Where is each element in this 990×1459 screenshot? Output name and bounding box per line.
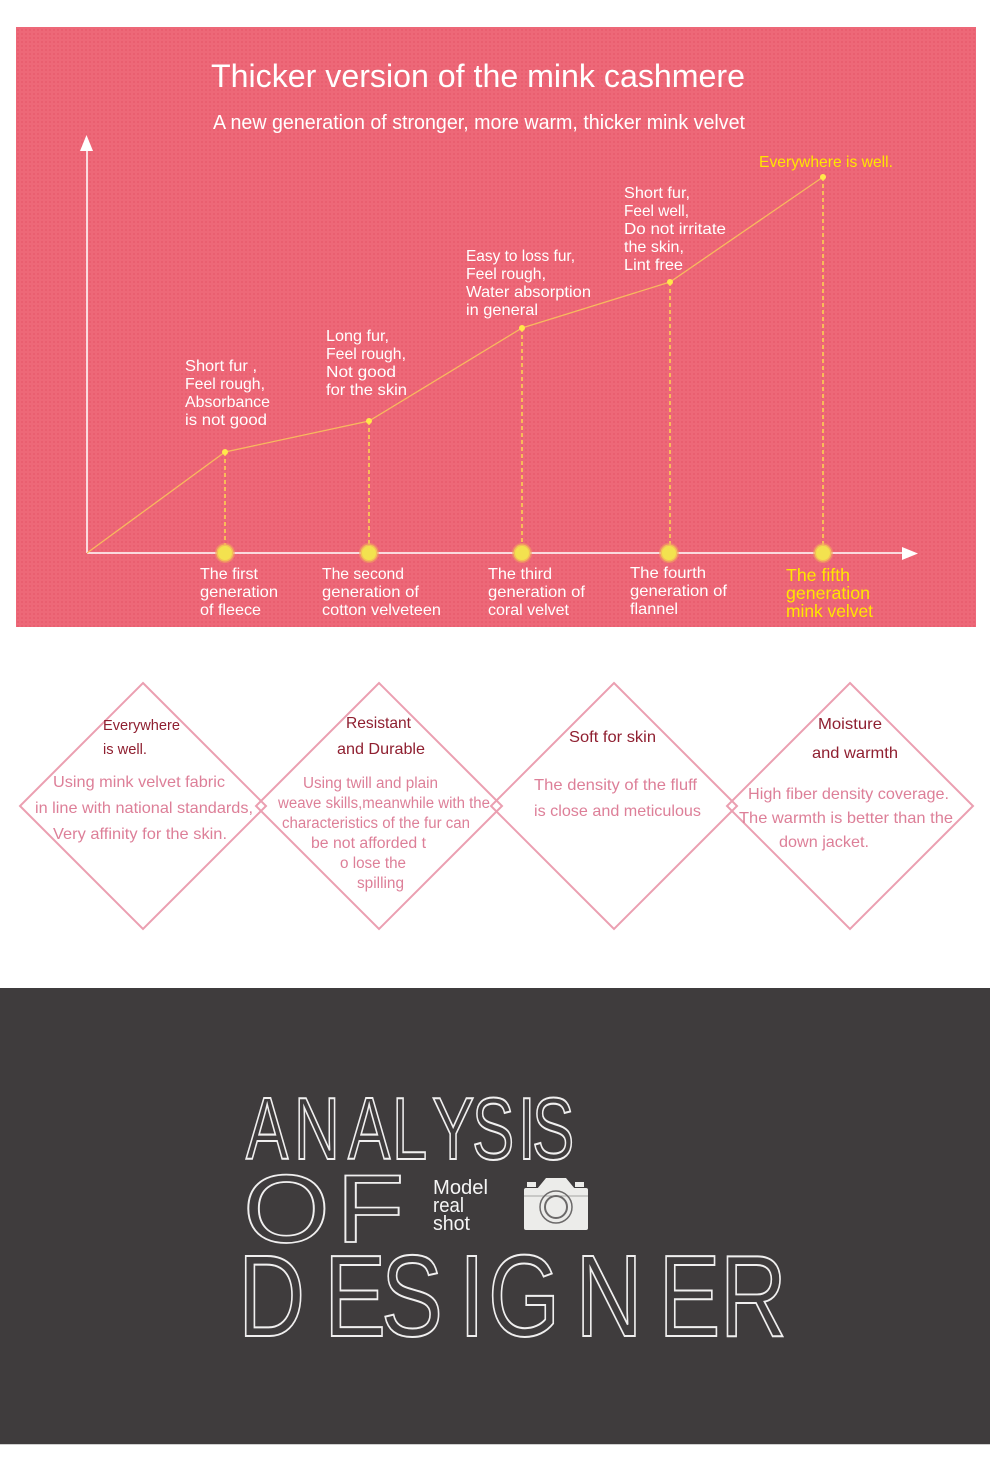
heading: Everywhere	[103, 717, 180, 734]
heading: and warmth	[812, 745, 898, 762]
panel: feature diamond 3	[491, 683, 737, 929]
heading: analysis: ANALYSIS	[246, 1081, 574, 1179]
label: fourth generation: generation of	[630, 583, 728, 600]
panel: feature diamond 2	[256, 683, 502, 929]
divider	[0, 1444, 990, 1445]
title: Thicker version of the mink cashmere	[211, 58, 745, 94]
label: fourth generation: The fourth	[630, 565, 706, 582]
heading: is well.	[103, 741, 147, 758]
label: fifth generation: mink velvet	[786, 601, 873, 621]
body text: o lose the	[340, 855, 406, 872]
label: first generation: of fleece	[200, 602, 261, 619]
note: fourth generation: the skin,	[624, 239, 684, 256]
label: fifth generation: The fifth	[786, 565, 850, 585]
label: first generation: generation	[200, 584, 278, 601]
note: fourth generation: Feel well,	[624, 203, 689, 220]
heading: and Durable	[337, 741, 425, 758]
label: third generation: generation of	[488, 584, 586, 601]
body text: The density of the fluff	[534, 777, 698, 794]
body text: High fiber density coverage.	[748, 786, 949, 803]
body text: weave skills,meanwhile with the	[277, 795, 490, 812]
body text: down jacket.	[779, 834, 869, 851]
line chart: softness progression	[87, 174, 832, 562]
body text: Very affinity for the skin.	[53, 826, 227, 843]
heading: designer: DESIGNER	[238, 1232, 787, 1361]
note: fifth generation: Everywhere is well.	[759, 154, 893, 171]
heading: of: OF	[243, 1155, 404, 1263]
body text: Using mink velvet fabric	[53, 774, 225, 791]
body text: be not afforded t	[311, 835, 427, 852]
icon: camera	[524, 1178, 588, 1230]
label: fifth generation: generation	[786, 583, 870, 603]
body text: Using twill and plain	[303, 775, 438, 792]
heading: Moisture	[818, 716, 882, 733]
label: third generation: The third	[488, 566, 552, 583]
caption: model real shot: Model	[433, 1177, 488, 1199]
arrow: vertical axis	[80, 135, 93, 553]
note: first generation: is not good	[185, 412, 267, 429]
note: first generation: Feel rough,	[185, 376, 265, 393]
label: second generation: cotton velveteen	[322, 602, 441, 619]
label: second generation: The second	[322, 566, 404, 583]
label: second generation: generation of	[322, 584, 420, 601]
caption: model real shot: shot	[433, 1213, 470, 1235]
note: fourth generation: Lint free	[624, 257, 683, 274]
note: second generation: Feel rough,	[326, 346, 406, 363]
subtitle: A new generation of stronger, more warm, thicker mink velvet	[213, 112, 745, 134]
body text: in line with national standards,	[35, 800, 253, 817]
note: first generation: Absorbance	[185, 394, 270, 411]
panel: designer analysis banner	[0, 988, 990, 1444]
label: fourth generation: flannel	[630, 601, 678, 618]
note: second generation: Long fur,	[326, 328, 389, 345]
body text: The warmth is better than the	[739, 810, 953, 827]
caption: model real shot: real	[433, 1195, 464, 1217]
body text: is close and meticulous	[534, 803, 701, 820]
note: first generation: Short fur ,	[185, 358, 257, 375]
note: fourth generation: Short fur,	[624, 185, 690, 202]
label: first generation: The first	[200, 566, 259, 583]
note: third generation: Feel rough,	[466, 266, 546, 283]
label: third generation: coral velvet	[488, 602, 570, 619]
note: third generation: Water absorption	[466, 284, 591, 301]
body text: characteristics of the fur can	[282, 815, 470, 832]
note: third generation: in general	[466, 302, 538, 319]
panel: feature diamond 4	[727, 683, 973, 929]
panel: mink velvet generations chart	[16, 27, 976, 627]
body text: spilling	[357, 875, 404, 892]
heading: Resistant	[346, 715, 412, 732]
panel: feature diamond 1	[20, 683, 266, 929]
note: second generation: for the skin	[326, 382, 407, 399]
note: second generation: Not good	[326, 364, 396, 381]
note: fourth generation: Do not irritate	[624, 221, 726, 238]
note: third generation: Easy to loss fur,	[466, 248, 575, 265]
arrow: horizontal axis	[87, 547, 918, 560]
heading: Soft for skin	[569, 729, 656, 746]
